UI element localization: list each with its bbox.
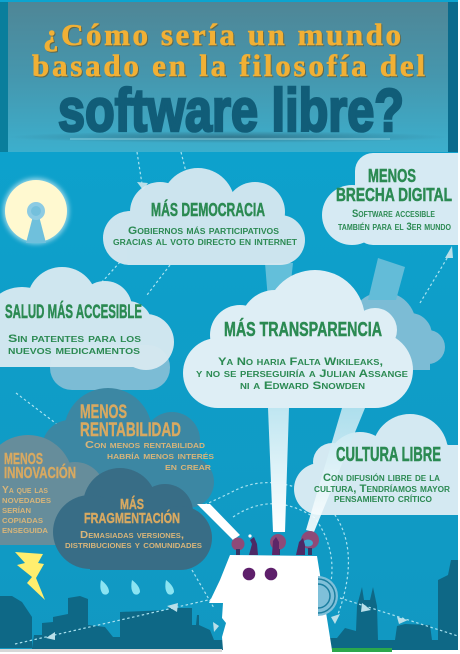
text: innovación: copiadas <box>2 514 43 526</box>
text: cultura libre: pensamiento crítico <box>334 493 432 505</box>
light beam to the left <box>197 504 240 540</box>
text: fragmentación <box>65 529 202 551</box>
heading: menos innovación: INNOVACIÓN <box>4 463 76 482</box>
text: brecha <box>338 208 451 233</box>
cloud: salud más accesible <box>0 267 174 370</box>
text: cultura libre: Con difusión libre de la <box>323 472 440 484</box>
light beams upper <box>265 258 405 300</box>
text: fragmentación: distribuciones y comunidades <box>65 539 202 551</box>
text: innovación: Ya que las <box>2 484 48 496</box>
city skyline left <box>0 596 224 650</box>
text: cultura libre: cultura, Tendríamos mayor <box>314 483 450 495</box>
text: rentabilidad: habría menos interés <box>107 450 214 462</box>
cloud: menos rentabilidad <box>42 388 214 508</box>
heading: salud: SALUD MÁS ACCESIBLE <box>5 301 142 323</box>
heading: menos brecha digital <box>336 166 452 205</box>
text: rentabilidad: Con menos rentabilidad <box>85 439 205 451</box>
heading: menos rentabilidad: RENTABILIDAD <box>80 420 181 441</box>
cloud: menos innovación <box>0 435 105 545</box>
heading: transparencia: MÁS TRANSPARENCIA <box>224 318 382 341</box>
cloud: más fragmentación <box>53 468 212 570</box>
cloud: cultura libre <box>294 414 458 515</box>
people and light projectors <box>232 531 319 555</box>
icon: open source logo <box>3 178 69 244</box>
icon: rain drops <box>100 580 174 595</box>
text: salud: Sin patentes para los <box>8 333 142 345</box>
text: democracia: gracias al voto directo en internet <box>113 236 297 248</box>
icon: lightning bolt <box>15 552 45 600</box>
light beams lower <box>268 408 365 532</box>
cloud: más democracia <box>103 168 305 265</box>
head <box>209 555 332 650</box>
heading: más democracia: MÁS DEMOCRACIA <box>151 199 265 220</box>
text: democracia <box>113 225 297 248</box>
text: salud: nuevos medicamentos <box>8 345 141 357</box>
text: salud <box>8 333 142 357</box>
city skyline right <box>330 560 458 650</box>
heading: más fragmentación <box>84 496 180 527</box>
text: transparencia: y no se perseguiría a Julian Assange <box>196 368 409 380</box>
text: cultura libre <box>314 472 450 505</box>
text: rentabilidad <box>85 439 214 473</box>
text: democracia: Gobiernos más participativos <box>128 225 280 237</box>
text: innovación <box>2 484 51 536</box>
heading: menos rentabilidad: MENOS <box>80 402 127 423</box>
text: transparencia: Ya No haria Falta Wikileaks, <box>218 356 383 368</box>
text: transparencia: ni a Edward Snowden <box>240 380 365 392</box>
dashed connector arrows lower <box>15 595 458 644</box>
heading: menos rentabilidad <box>80 402 181 441</box>
heading: menos brecha digital: MENOS <box>368 166 416 186</box>
text: transparencia <box>196 356 409 392</box>
cloud: back mid-blue left <box>50 345 170 390</box>
cloud: más transparencia <box>183 270 413 408</box>
text: fragmentación: Demasiadas versiones, <box>80 529 184 541</box>
heading: más fragmentación: FRAGMENTACIÓN <box>84 509 180 527</box>
heading: más fragmentación: MÁS <box>120 496 144 513</box>
text: innovación: serían <box>2 504 31 516</box>
cloud: menos brecha digital <box>322 153 458 245</box>
heading: menos innovación: MENOS <box>4 451 43 468</box>
header banner <box>0 2 458 152</box>
dashed connector arrows upper <box>16 152 453 431</box>
heading: menos innovación <box>4 451 76 482</box>
text: innovación: novedades <box>2 494 51 506</box>
title line 1: ¿Cómo sería un mundo <box>43 17 401 52</box>
ground strip <box>0 649 222 652</box>
text: rentabilidad: en crear <box>165 461 211 473</box>
text: innovación: enseguida <box>2 524 48 536</box>
text: brecha: Software accesible <box>352 208 436 220</box>
head ear <box>318 576 338 616</box>
head eyes <box>243 568 277 580</box>
dashed orbit arcs <box>192 483 348 622</box>
green ground <box>332 648 392 652</box>
cloud: back mid-blue right <box>350 292 445 370</box>
title line 2: basado en la filosofía del <box>32 48 425 83</box>
